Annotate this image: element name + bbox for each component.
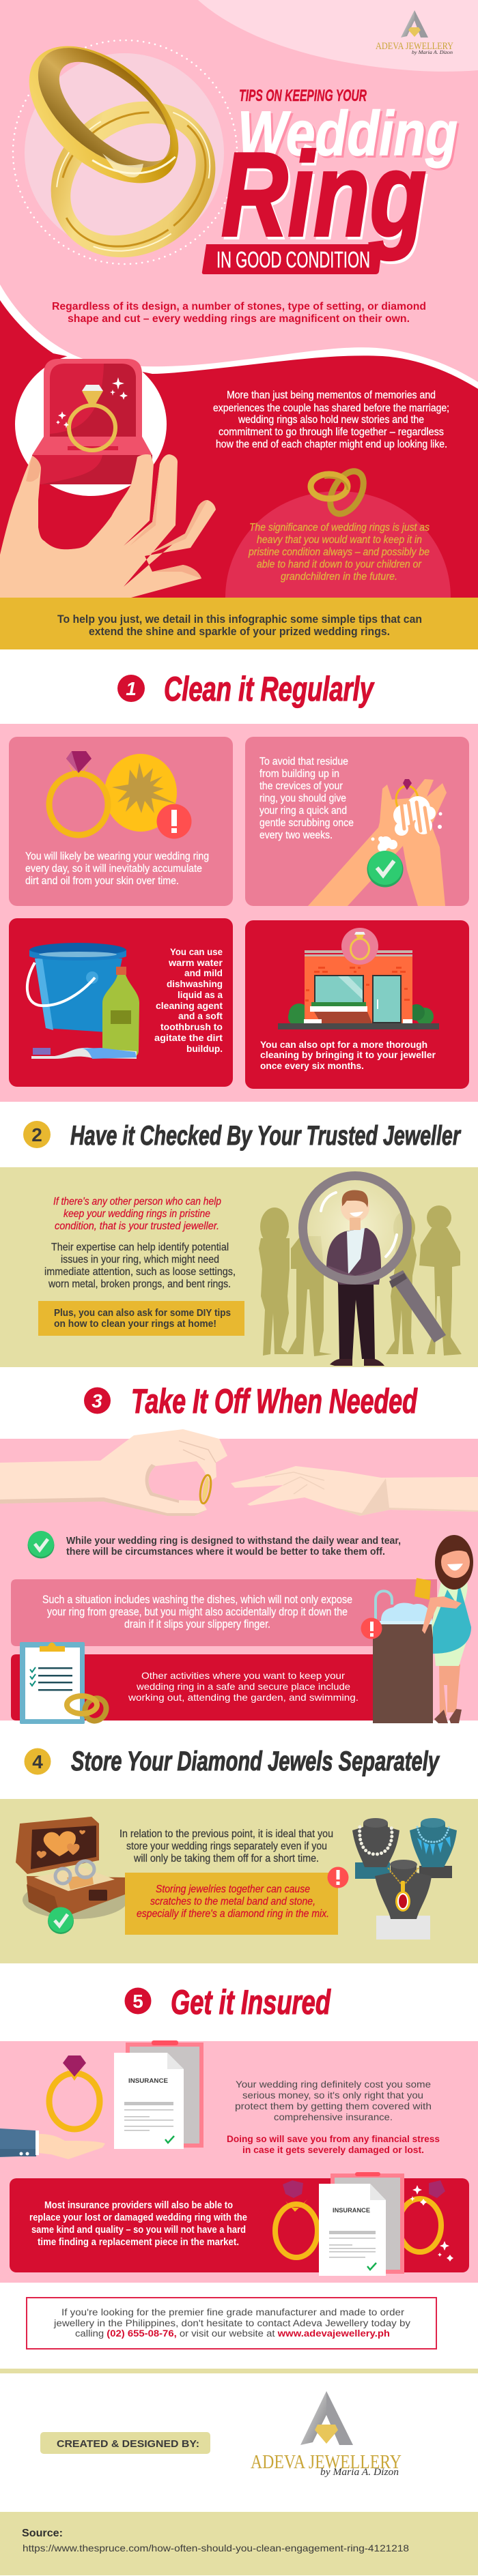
panel: significance dome	[225, 491, 451, 598]
text: expertise: Their expertise can help identify potential	[51, 1242, 229, 1253]
text: wear and tear: there will be circumstances where it would be better to take them off.	[66, 1547, 385, 1557]
text: covered by insurance: serious money, so it's only right that you	[242, 2090, 423, 2101]
text: expertise: worn metal, broken prongs, and bent rings.	[48, 1278, 231, 1290]
panel: source: Source:	[22, 2528, 63, 2539]
text: covered by insurance	[235, 2079, 432, 2122]
logo: Adeva Jewellery bottom: by Maria A. Dizon	[320, 2467, 399, 2478]
text: store separately: will only be taking them off for a short time.	[133, 1853, 319, 1864]
text: cleaning by bringing it to your jeweller	[260, 1049, 436, 1060]
logo: Adeva Jewellery bottom	[251, 2391, 402, 2478]
text: expertise	[44, 1242, 236, 1290]
callout: scratches: Storing jewelries together can cause	[156, 1884, 310, 1895]
callout: DIY tips	[38, 1301, 244, 1336]
icon: alert	[328, 1867, 348, 1888]
icon: insurance document	[114, 2040, 203, 2149]
callout: contact box	[27, 2298, 436, 2349]
callout: scratches: scratches to the metal band and stone,	[150, 1896, 315, 1907]
card: other activities	[11, 1654, 376, 1721]
text: red lead: condition, that is your trusted jeweller.	[55, 1220, 219, 1232]
text: covered by insurance: Your wedding ring definitely cost you some	[236, 2079, 431, 2090]
card: scrubbing	[245, 737, 469, 906]
heading: tip 5: Get it Insured	[171, 1983, 331, 2021]
card: warm water	[9, 918, 233, 1087]
text: You can use	[170, 946, 223, 957]
card: washing dishes: your ring from grease, but you might also accidentally drop it down the	[47, 1605, 348, 1618]
text: You will likely be wearing your wedding ring	[25, 851, 209, 862]
callout: scratches	[125, 1873, 338, 1935]
title: TIPS ON KEEPING YOUR	[239, 87, 367, 105]
icon: hands removing ring	[0, 1429, 478, 1516]
title: IN GOOD CONDITION	[216, 247, 370, 272]
text block: significance: grandchildren in the future.	[281, 571, 397, 583]
card: other activities: working out, attending the garden, and swimming.	[128, 1692, 358, 1703]
title	[202, 87, 460, 274]
panel: source: https://www.thespruce.com/how-often-should-you-clean-engagement-ring-4121218	[23, 2543, 409, 2553]
text: from building up in	[259, 768, 339, 780]
text	[259, 756, 354, 841]
heading: tip 4: 4	[32, 1751, 43, 1772]
text: your ring a quick and	[259, 805, 347, 817]
panel: tip 5	[0, 2040, 478, 2283]
text block: significance: The significance of wedding rings is just as	[249, 522, 430, 533]
card: washing dishes: drain if it slips your slippery finger.	[124, 1618, 270, 1630]
panel: tip 1	[0, 724, 478, 1102]
text: wear and tear	[66, 1536, 401, 1557]
icon: rings and document	[275, 2172, 453, 2276]
text: financial stress: Doing so will save you from any financial stress	[227, 2134, 440, 2144]
text: store separately: In relation to the previous point, it is ideal that you	[120, 1828, 333, 1840]
text block: mementos: how the end of each chapter might end up looking like.	[216, 439, 447, 450]
text: once every six months.	[260, 1060, 364, 1071]
callout: contact box: calling (02) 655-08-76, or visit our website at www.adevajewellery.ph	[75, 2328, 390, 2339]
icon: jeweller	[326, 1190, 384, 1366]
text: expertise: immediate attention, such as loose settings,	[44, 1266, 236, 1278]
callout: contact box: jewellery in the Philippines, don't hesitate to contact Adeva Jewellery today by	[53, 2318, 410, 2328]
text: every day, so it will inevitably accumulate	[25, 863, 202, 875]
text block: mementos	[213, 390, 449, 450]
icon: toothbrush	[31, 1048, 137, 1059]
text: agitate the dirt	[154, 1032, 223, 1043]
icon: check	[48, 1907, 74, 1934]
card: replacement	[10, 2172, 469, 2276]
panel: yellow intro band: To help you just, we detail in this infographic some simple tips that can	[57, 613, 422, 626]
logo: Adeva Jewellery top	[376, 10, 453, 55]
text: financial stress	[227, 2134, 440, 2155]
icon: necklace busts	[352, 1818, 457, 1940]
text block: mementos: commitment to go through life together – regardless	[219, 426, 444, 438]
text	[25, 851, 209, 887]
panel: hero	[0, 0, 478, 600]
heading: tip 1: Clean it Regularly	[164, 670, 375, 708]
icon: jewellery store	[278, 950, 439, 1029]
icon: alert	[361, 1618, 382, 1639]
text: toothbrush to	[160, 1021, 223, 1032]
icon: crowd silhouettes	[259, 1205, 462, 1356]
text: buildup.	[186, 1043, 223, 1054]
text: gentle scrubbing once	[259, 817, 354, 829]
icon: alert	[157, 804, 191, 839]
text: red lead: keep your wedding rings in pristine	[64, 1208, 210, 1220]
card: accumulate dirt	[9, 737, 233, 906]
callout: scratches: especially if there's a diamond ring in the mix.	[137, 1908, 329, 1920]
heading: tip 5	[124, 1983, 331, 2021]
icon: ring box	[32, 359, 152, 484]
icon: insurance document: INSURANCE	[128, 2077, 168, 2085]
icon: washing hands	[308, 779, 447, 906]
text: covered by insurance: protect them by getting them covered with	[235, 2101, 432, 2111]
icon: jewellery box	[16, 1817, 128, 1919]
text	[260, 1039, 436, 1071]
text: and mild	[184, 967, 223, 978]
divider band	[0, 2369, 478, 2373]
icon: ring on hand	[0, 2055, 105, 2159]
text: store separately: store your wedding rings separately even if you	[126, 1841, 327, 1852]
logo: Adeva Jewellery bottom: ADEVA JEWELLERY	[251, 2452, 402, 2473]
card: washing dishes: Such a situation includes washing the dishes, which will not only expose	[42, 1593, 352, 1606]
text: To avoid that residue	[259, 756, 348, 767]
text block: significance: heavy that you would want to keep it in	[257, 534, 422, 546]
text	[154, 946, 223, 1054]
text: warm water	[168, 957, 223, 968]
credit label: CREATED & DESIGNED BY:	[57, 2438, 199, 2450]
panel: yellow intro band: extend the shine and sparkle of your prized wedding rings.	[89, 625, 390, 638]
icon: sink	[373, 1591, 436, 1723]
card: other activities: Other activities where you want to keep your	[141, 1670, 345, 1681]
logo: Adeva Jewellery top: by Maria A. Dizon	[412, 50, 453, 55]
text: expertise: issues in your ring, which might need	[61, 1254, 219, 1265]
heading: tip 3: 3	[92, 1390, 102, 1411]
text block: mementos: wedding rings also hold new stories and the	[238, 414, 424, 426]
text block: mementos: experiences the couple has shared before the marriage;	[213, 402, 449, 414]
text: cleaning agent	[156, 1000, 223, 1011]
icon: interlocked gold rings	[29, 46, 216, 258]
text block: significance: able to hand it down to your children or	[257, 559, 422, 570]
card: other activities: wedding ring in a safe and secure place include	[136, 1681, 350, 1692]
text: red lead: If there's any other person who can help	[53, 1196, 221, 1208]
text: red lead	[53, 1196, 221, 1232]
text: every two weeks.	[259, 830, 333, 841]
panel: yellow intro band	[0, 598, 478, 649]
card: jeweller	[245, 920, 469, 1089]
text: financial stress: in case it gets severely damaged or lost.	[242, 2145, 424, 2155]
text block: intro: shape and cut – every wedding rings are magnificent on their own.	[68, 313, 410, 325]
text block: intro: Regardless of its design, a number of stones, type of setting, or diamond	[52, 301, 426, 312]
icon: check	[27, 1531, 55, 1558]
callout: DIY tips: on how to clean your rings at home!	[54, 1318, 216, 1330]
panel: source	[0, 2512, 478, 2575]
icon: clipboard with rings	[20, 1642, 110, 1725]
credit label	[40, 2432, 210, 2454]
logo: Adeva Jewellery top: ADEVA JEWELLERY	[376, 41, 453, 52]
icon: dirty ring	[49, 751, 177, 835]
card: replacement: replace your lost or damaged wedding ring with the	[29, 2212, 247, 2223]
text block: intro	[52, 301, 426, 325]
icon: woman washing dishes	[414, 1535, 473, 1723]
icon: check	[367, 851, 403, 887]
icon: store sign	[341, 928, 378, 965]
text: the crevices of your	[259, 780, 343, 792]
card: washing dishes	[11, 1579, 437, 1646]
text: dirt and oil from your skin over time.	[25, 875, 179, 887]
text: You can also opt for a more thorough	[260, 1039, 427, 1050]
title: Ring	[221, 128, 426, 261]
heading: tip 1	[117, 670, 375, 708]
card: replacement: same kind and quality – so you will not have a hard	[31, 2224, 246, 2236]
icon: small gold rings	[311, 466, 370, 519]
panel: tip 4	[0, 1799, 478, 1963]
text: covered by insurance: comprehensive insurance.	[274, 2112, 393, 2122]
panel: tip 2	[0, 1167, 478, 1367]
text: ring, you should give	[259, 793, 346, 804]
panel: tip 3	[0, 1429, 478, 1725]
heading: tip 2: 2	[31, 1124, 42, 1145]
text: dishwashing	[167, 978, 223, 989]
icon: magnifying glass with jeweller	[302, 1175, 446, 1366]
text: store separately	[120, 1828, 333, 1864]
text: wear and tear: While your wedding ring is designed to withstand the daily wear and tear,	[66, 1536, 401, 1547]
text block: significance: pristine condition always – and possibly be	[248, 546, 430, 558]
card: replacement: time finding a replacement piece in the market.	[38, 2236, 239, 2248]
icon: hand holding box	[0, 454, 216, 598]
callout: contact box: If you're looking for the premier fine grade manufacturer and made to order	[61, 2307, 405, 2317]
icon: rings and document: INSURANCE	[333, 2207, 370, 2214]
icon: bucket	[27, 943, 126, 1032]
text: liquid as a	[178, 989, 223, 1000]
heading: tip 5: 5	[132, 1991, 143, 2012]
icon: dish soap	[102, 967, 139, 1056]
text block: mementos: More than just being mementos of memories and	[227, 390, 436, 401]
text block: significance	[248, 522, 430, 583]
heading: tip 1: 1	[126, 678, 137, 699]
callout: DIY tips: Plus, you can also ask for some DIY tips	[54, 1307, 231, 1319]
card: replacement: Most insurance providers will also be able to	[44, 2199, 233, 2211]
text: and a soft	[178, 1010, 223, 1021]
